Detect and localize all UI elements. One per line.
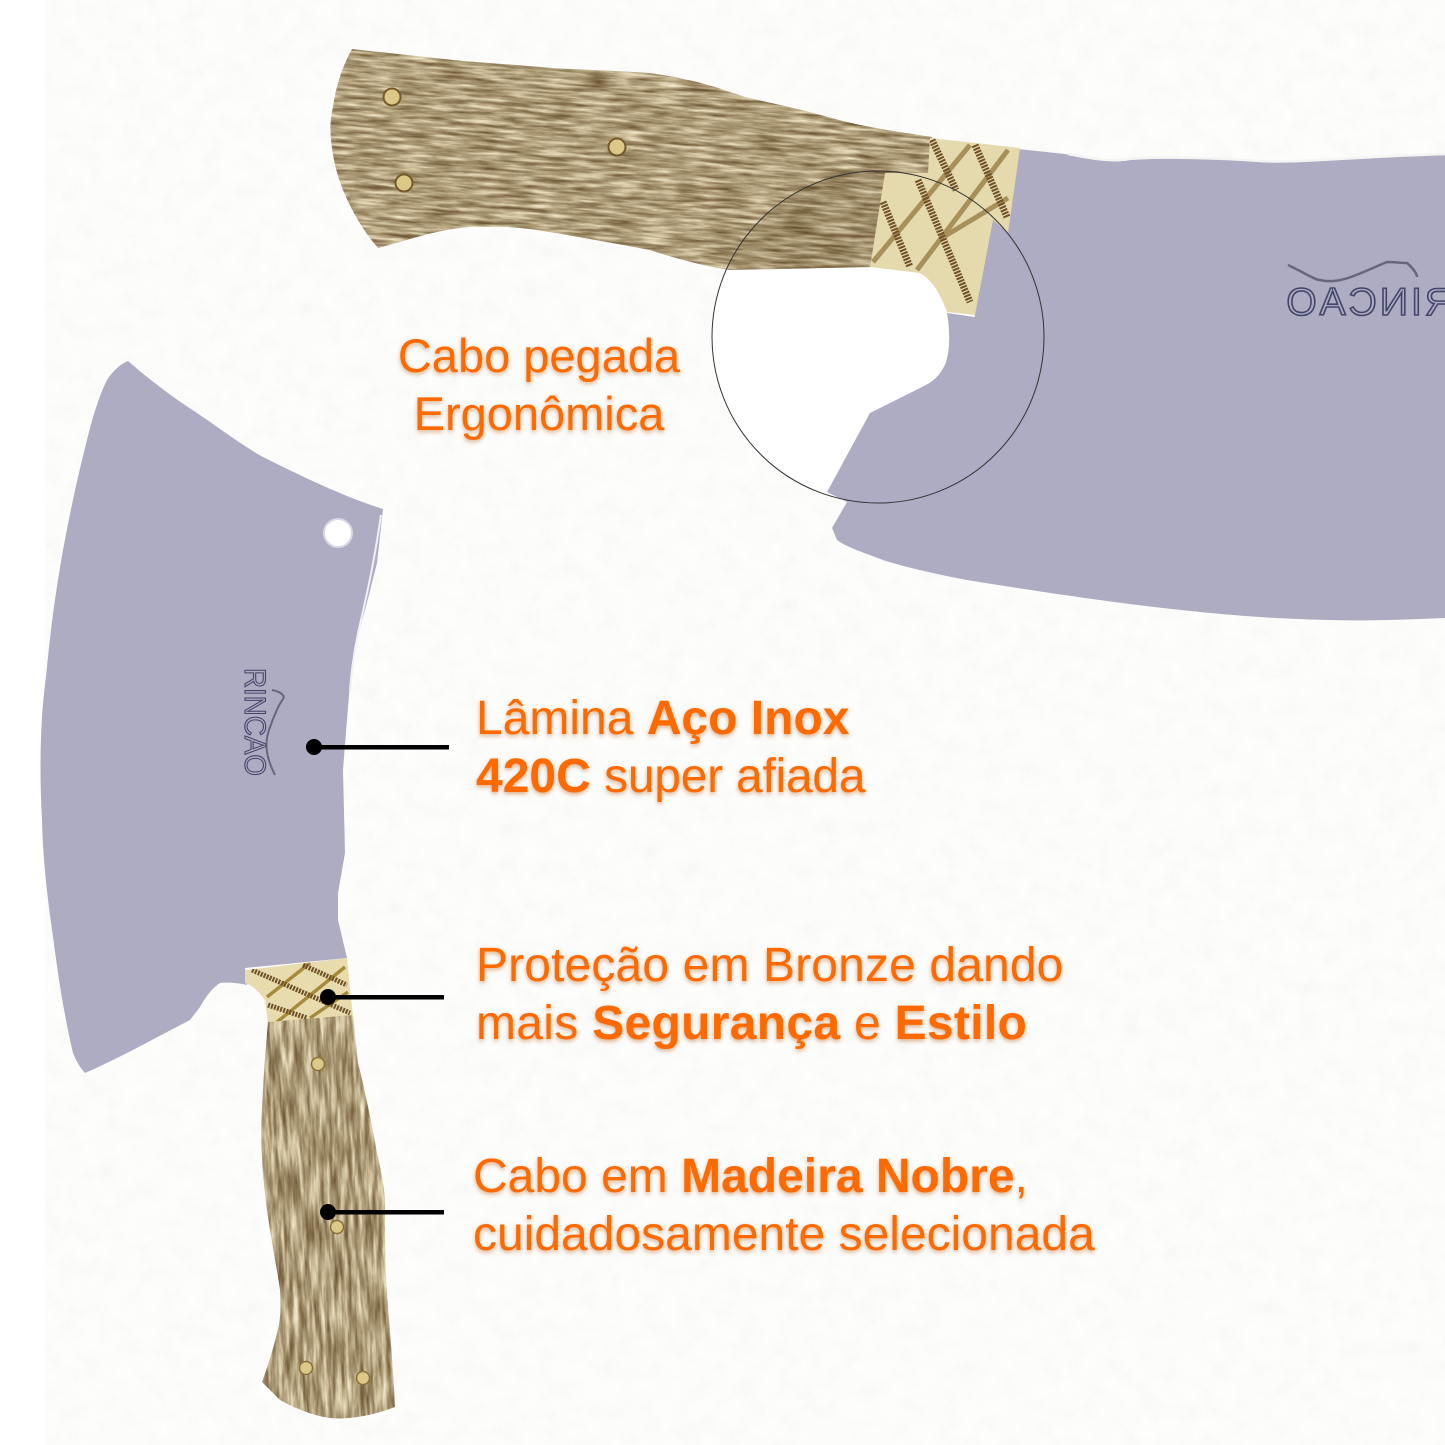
label: ergonomic grip: Cabo pegada (398, 329, 680, 382)
left cleaver rivets (300, 1058, 370, 1384)
pointer: blade (306, 739, 449, 755)
left cleaver blade (40, 361, 383, 1073)
top cleaver (290, 0, 1445, 620)
left cleaver handle (261, 1015, 395, 1418)
left cleaver hanging hole (324, 519, 352, 547)
label: ergonomic grip: Ergonômica (414, 387, 664, 440)
label: noble wood handle: Cabo em Madeira Nobre, (473, 1150, 1028, 1203)
label: stainless steel blade: Lâmina Aço Inox (476, 692, 849, 745)
top cleaver spine highlight (1068, 154, 1445, 161)
left cleaver edge highlight (350, 515, 381, 690)
top cleaver blade (827, 149, 1445, 620)
label: stainless steel blade (474, 692, 868, 806)
label: bronze guard (476, 939, 1064, 1054)
label: noble wood handle: cuidadosamente selecionada (473, 1208, 1095, 1261)
label: bronze guard: Proteção em Bronze dando (476, 939, 1064, 992)
top cleaver handle (330, 49, 932, 270)
left cleaver bronze guard (245, 958, 353, 1024)
pointer: guard (320, 989, 444, 1005)
pointer: handle (320, 1204, 444, 1220)
top cleaver rivets (384, 88, 626, 192)
left cleaver engraved logo: RINCAO (238, 668, 271, 776)
label: stainless steel blade: 420C super afiada (476, 750, 865, 803)
top cleaver bronze guard (870, 138, 1020, 315)
magnifier circle highlighting the ergonomic grip (712, 171, 1044, 503)
left cleaver (40, 361, 423, 1443)
label: bronze guard: mais Segurança e Estilo (476, 997, 1027, 1050)
magnifier circle outline (712, 171, 1044, 503)
left cleaver engraved logo (238, 668, 284, 776)
label: ergonomic grip (397, 329, 682, 445)
top cleaver engraved logo (1283, 262, 1445, 324)
label: noble wood handle (472, 1150, 1097, 1261)
